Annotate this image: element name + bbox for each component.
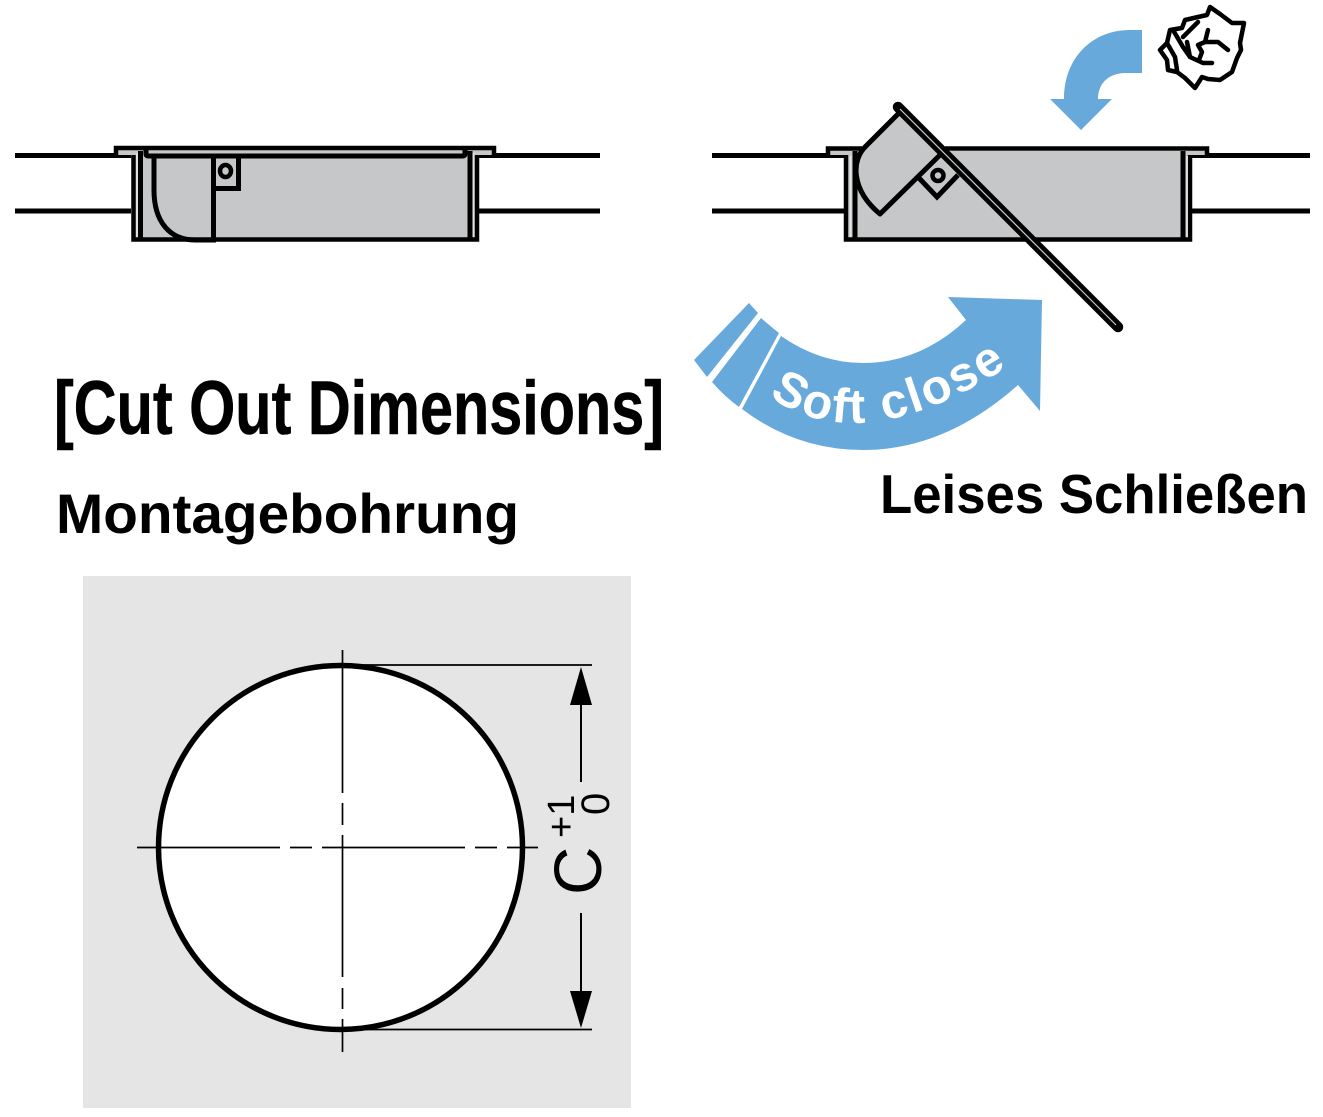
icon: crumpled paper <box>1160 7 1244 88</box>
panel: cut out drawing <box>83 576 631 1108</box>
hinge bracket <box>918 170 958 197</box>
dimension label: C <box>541 847 616 895</box>
dimension label: +1 <box>541 795 583 838</box>
dimension arrows <box>570 667 592 1028</box>
hinge bracket <box>214 156 238 188</box>
cut out circle <box>158 666 522 1030</box>
heading: Cut Out Dimensions: [Cut Out Dimensions] <box>54 366 664 451</box>
dimension label: 0 <box>574 793 618 815</box>
dimension label <box>541 793 618 895</box>
flap mechanism <box>154 156 238 240</box>
caption: Leises Schließen: Leises Schließen <box>880 463 1308 525</box>
tilted flap <box>856 114 958 214</box>
arrow tail stripe one <box>694 303 758 377</box>
extension lines <box>342 665 592 1030</box>
housing body <box>828 148 1207 240</box>
housing body <box>114 148 496 240</box>
subheading: Montagebohrung: Montagebohrung <box>56 482 519 545</box>
panel lines left and right <box>15 156 600 211</box>
tilted lid <box>898 107 1118 327</box>
arrow body and head <box>742 297 1042 450</box>
diagram: closed flap installed in panel <box>15 148 600 240</box>
arrow label: Soft close <box>774 350 1002 424</box>
centre lines <box>137 650 538 1052</box>
diagram: open flap installed in panel <box>712 107 1310 327</box>
panel lines left and right <box>712 156 1310 211</box>
arrow tail stripe two <box>712 318 779 407</box>
arrow: soft close curved band <box>694 297 1042 450</box>
arrow: waste falling into bin <box>1050 30 1142 130</box>
